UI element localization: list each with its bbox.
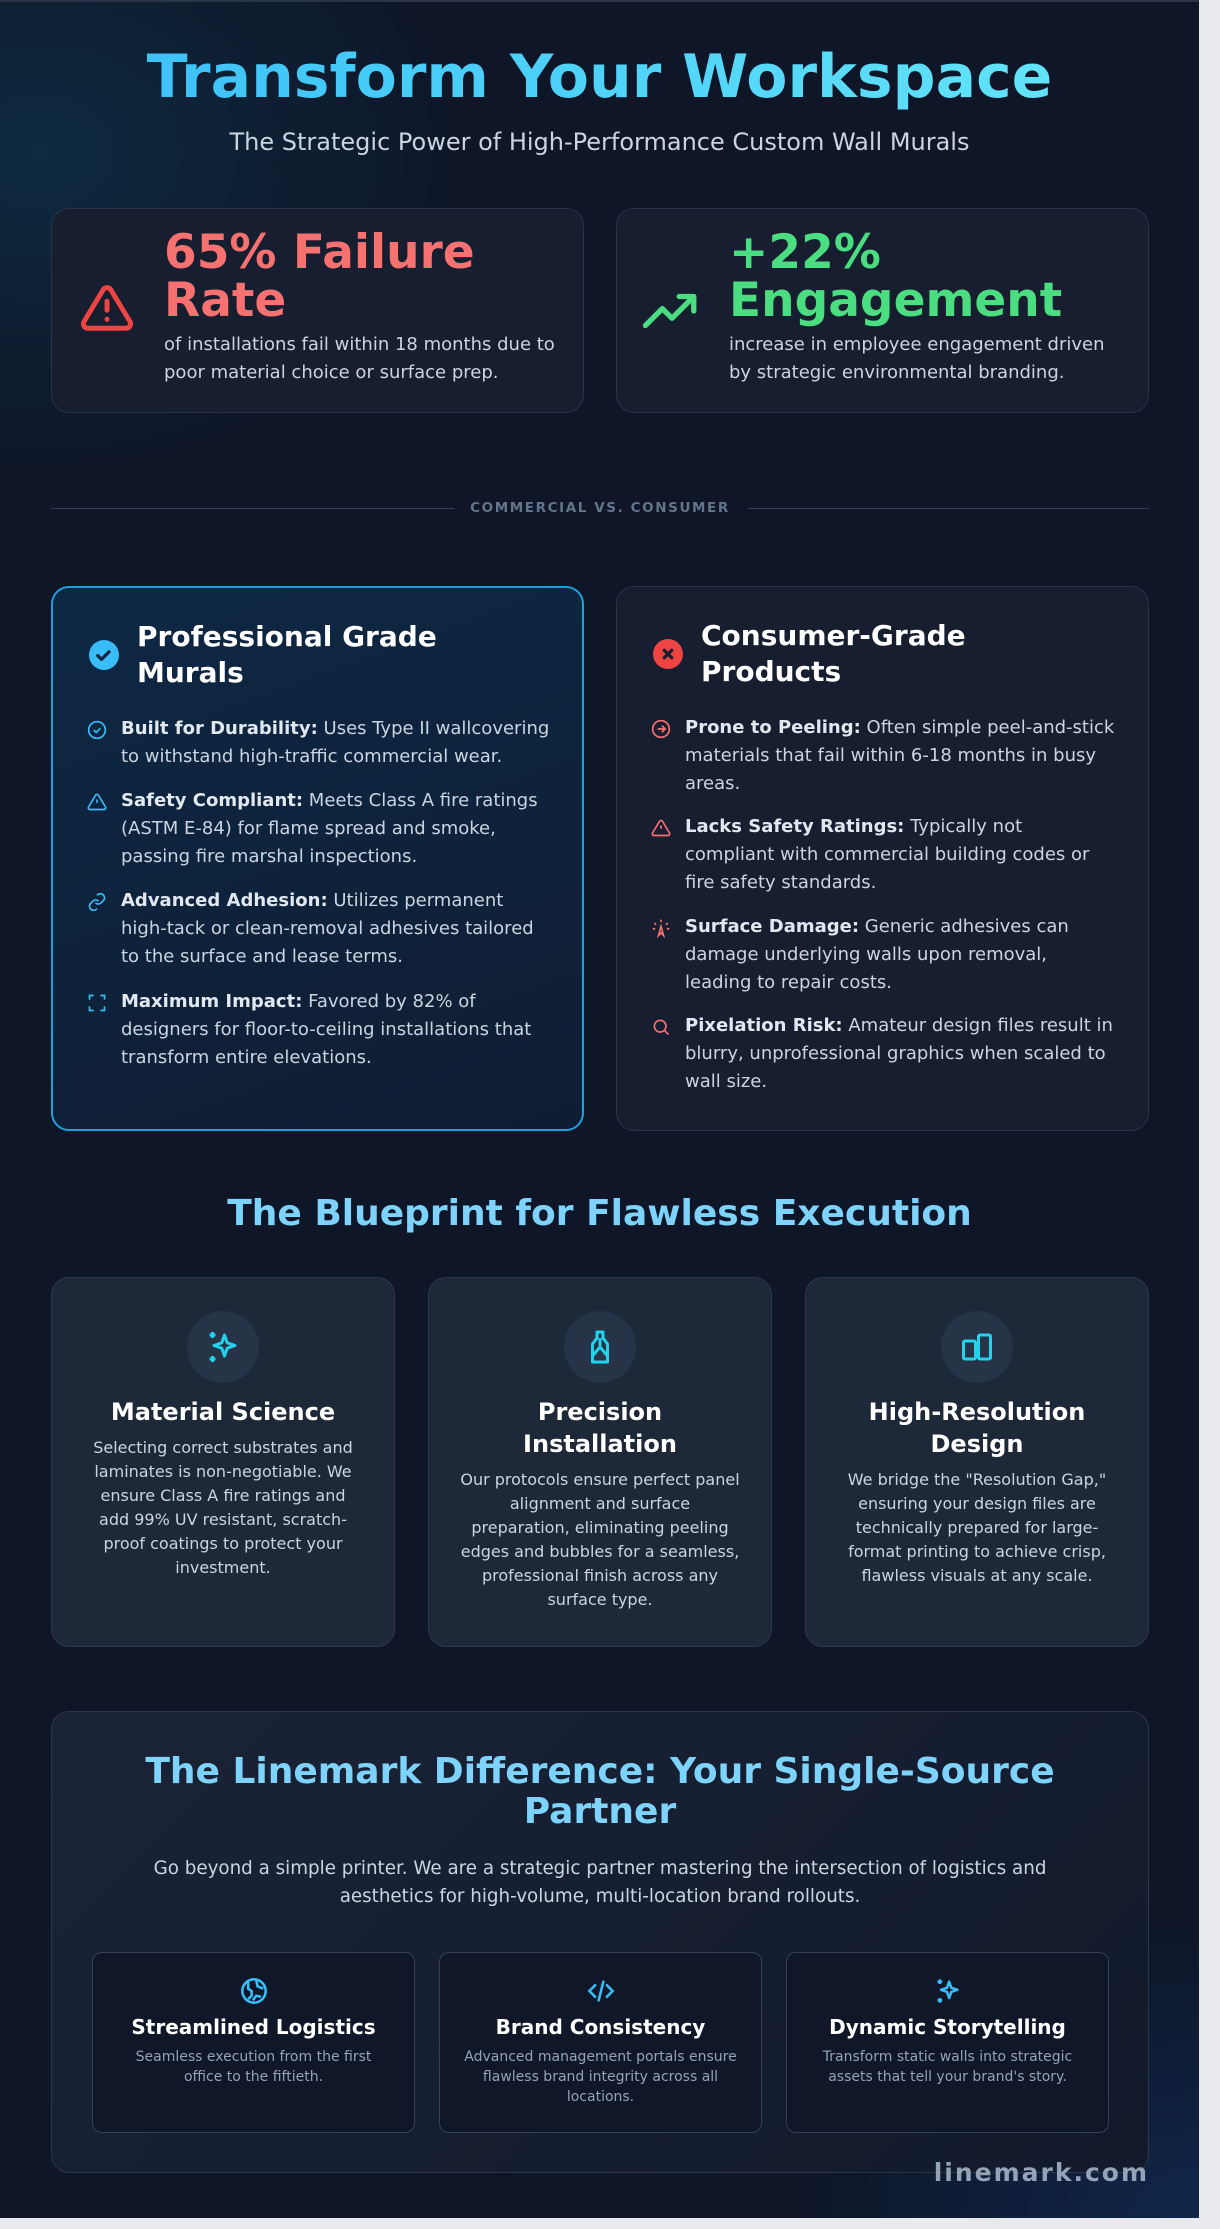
panel: linemark difference [51,1711,1149,2173]
icon: x circle [653,639,683,669]
card: precision installation: Precision [538,1398,662,1426]
card: material science: Selecting correct substrates and laminates is non-negotiable. We ensure Class A fire ratings and add 99% UV resistant, scratch-proof coatings to protect your investment. [93,1438,353,1577]
subcard: logistics [92,1952,415,2133]
heading [701,619,966,688]
subcard: brand consistency: Brand Consistency [496,2015,705,2039]
title: Transform Your Workspace [147,42,1052,112]
item: adhesion: Advanced Adhesion: Utilizes permanent high-tack or clean-removal adhesives tailored to the surface and lease terms. [121,890,534,967]
stat text: +22% Engagement [729,225,1062,328]
stat text [729,225,1104,383]
card: material science: Material Science [111,1398,335,1426]
stat text: of installations fail within 18 months due to poor material choice or surface prep. [164,334,555,383]
item: peeling: Prone to Peeling: Often simple peel-and-stick materials that fail within 6-18 months in busy areas. [685,717,1114,794]
panel: consumer grade [616,586,1149,1131]
icon: code [588,1980,614,2002]
heading: Consumer-Grade [701,619,966,652]
item: safety ratings: Lacks Safety Ratings: Typically not compliant with commercial building codes or fire safety standards. [685,816,1089,893]
subcard: storytelling: Transform static walls into strategic assets that tell your brand's story. [823,2049,1072,2085]
icon: sparkles [938,1979,959,2003]
item: surface damage: Surface Damage: Generic adhesives can damage underlying walls upon removal, leading to repair costs. [685,916,1069,993]
item: safety: Safety Compliant: Meets Class A fire ratings (ASTM E-84) for flame spread and smoke, passing fire marshal inspections. [121,790,538,867]
icon: devices [941,1311,1013,1383]
icon: check circle [89,640,119,670]
card: high-resolution design [805,1277,1149,1647]
stat text [164,225,555,383]
item: pixelation: Pixelation Risk: Amateur design files result in blurry, unprofessional graphics when scaled to wall size. [685,1015,1113,1092]
subcard: storytelling [786,1952,1109,2133]
card: high-resolution design: Design [930,1430,1023,1458]
heading [137,620,437,689]
icon: sparkles [187,1311,259,1383]
heading: Products [701,655,841,688]
section heading: blueprint: The Blueprint for Flawless Execution [227,1193,972,1234]
card: precision installation [428,1277,772,1647]
stat text: increase in employee engagement driven by strategic environmental branding. [729,334,1104,383]
subcard: logistics: Streamlined Logistics [131,2015,376,2039]
paragraph: Go beyond a simple printer. We are a strategic partner mastering the intersection of logistics and aesthetics for high-volume, multi-location brand rollouts. [154,1858,1046,1907]
card: precision installation: Installation [523,1430,677,1458]
panel: professional grade [51,586,584,1131]
card: high-resolution design: High-Resolution [869,1398,1085,1426]
card: high-resolution design: We bridge the "Resolution Gap," ensuring your design files are technically prepared for large-format printing to achieve crisp, flawless visuals at any scale. [848,1470,1106,1585]
heading: The Linemark Difference: Your Single-Source Partner [145,1751,1055,1832]
subcard: logistics: Seamless execution from the first office to the fiftieth. [136,2049,371,2085]
subcard: brand consistency: Advanced management portals ensure flawless brand integrity across all locations. [464,2049,737,2105]
item: impact: Maximum Impact: Favored by 82% of designers for floor-to-ceiling installations that transform entire elevations. [121,991,531,1068]
item: durability: Built for Durability: Uses Type II wallcovering to withstand high-traffic commercial wear. [121,718,549,767]
stat card: engagement [616,208,1149,413]
card: material science [51,1277,395,1647]
icon: globe [241,1978,267,2004]
subcard: storytelling: Dynamic Storytelling [829,2015,1066,2039]
subtitle: The Strategic Power of High-Performance Custom Wall Murals [230,128,969,156]
heading: Murals [137,656,244,689]
divider label: COMMERCIAL VS. CONSUMER [470,500,730,516]
icon: trending up [643,294,696,328]
stat text: 65% Failure Rate [164,225,475,328]
subcard: brand consistency [439,1952,762,2133]
heading: Professional Grade [137,620,437,653]
icon: warning [80,285,134,331]
icon: bottle [564,1311,636,1383]
footer: brand url: linemark.com [934,2158,1149,2187]
card: precision installation: Our protocols ensure perfect panel alignment and surface preparation, eliminating peeling edges and bubbles for a seamless, professional finish across any surface type. [460,1470,740,1609]
stat card: failure rate [51,208,584,413]
